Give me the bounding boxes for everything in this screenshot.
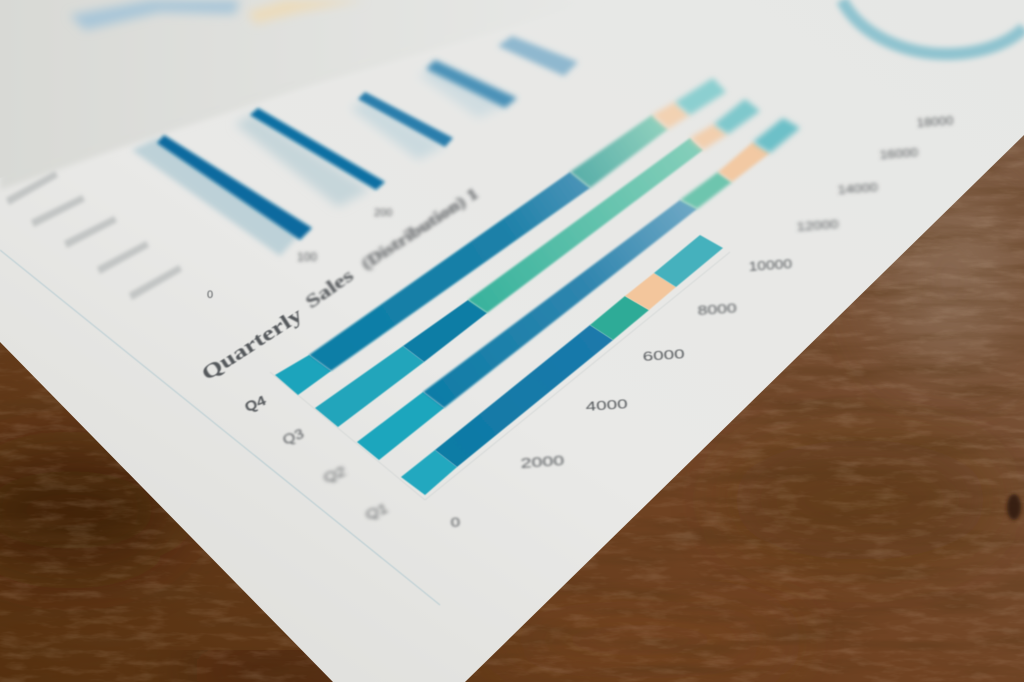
zero label: 0 xyxy=(207,289,213,301)
top chart x labels: 100 xyxy=(297,250,317,264)
top chart x labels xyxy=(297,207,392,264)
label Q3: Q3 xyxy=(280,426,306,448)
chart title: Quarterly xyxy=(198,304,307,385)
chart title: (Distribution) 1 xyxy=(358,184,482,274)
chart title: Sales xyxy=(301,264,358,313)
bar: Q2 xyxy=(357,118,800,460)
value axis labels: 10000 xyxy=(748,257,793,274)
bar group 5 xyxy=(498,36,578,76)
value axis labels: 14000 xyxy=(837,180,878,197)
chart title xyxy=(198,184,482,385)
top bar chart xyxy=(6,36,578,301)
bar: Q1 xyxy=(401,235,723,495)
bar: Q3 xyxy=(315,99,760,427)
bar group 1 xyxy=(132,135,312,256)
value axis labels: 4000 xyxy=(585,397,628,414)
back sheet xyxy=(0,0,364,188)
bar group 2 xyxy=(235,108,385,207)
back sheet blurred orange chart xyxy=(248,0,365,24)
label Q2: Q2 xyxy=(322,464,348,486)
grid lines xyxy=(270,252,730,500)
value axis labels: 12000 xyxy=(796,217,839,234)
top chart category ticks xyxy=(6,171,182,300)
back sheet donut ring xyxy=(842,0,1024,54)
value axis labels: 0 xyxy=(450,515,461,530)
category axis labels xyxy=(242,393,390,523)
bar: Q4 xyxy=(275,78,726,395)
value axis labels: 18000 xyxy=(916,114,954,130)
label Q4: Q4 xyxy=(242,393,269,415)
top chart x labels: 200 xyxy=(374,207,392,219)
value axis labels: 8000 xyxy=(697,301,737,318)
label Q1: Q1 xyxy=(364,501,390,523)
value axis labels: 6000 xyxy=(642,347,685,364)
bar group 4 xyxy=(418,60,517,118)
value axis labels: 2000 xyxy=(520,453,565,471)
paper margin line xyxy=(0,250,440,605)
value axis labels: 16000 xyxy=(879,145,918,162)
back sheet blurred blue chart xyxy=(70,0,240,30)
bar group 3 xyxy=(350,92,453,160)
value axis labels xyxy=(450,114,954,530)
